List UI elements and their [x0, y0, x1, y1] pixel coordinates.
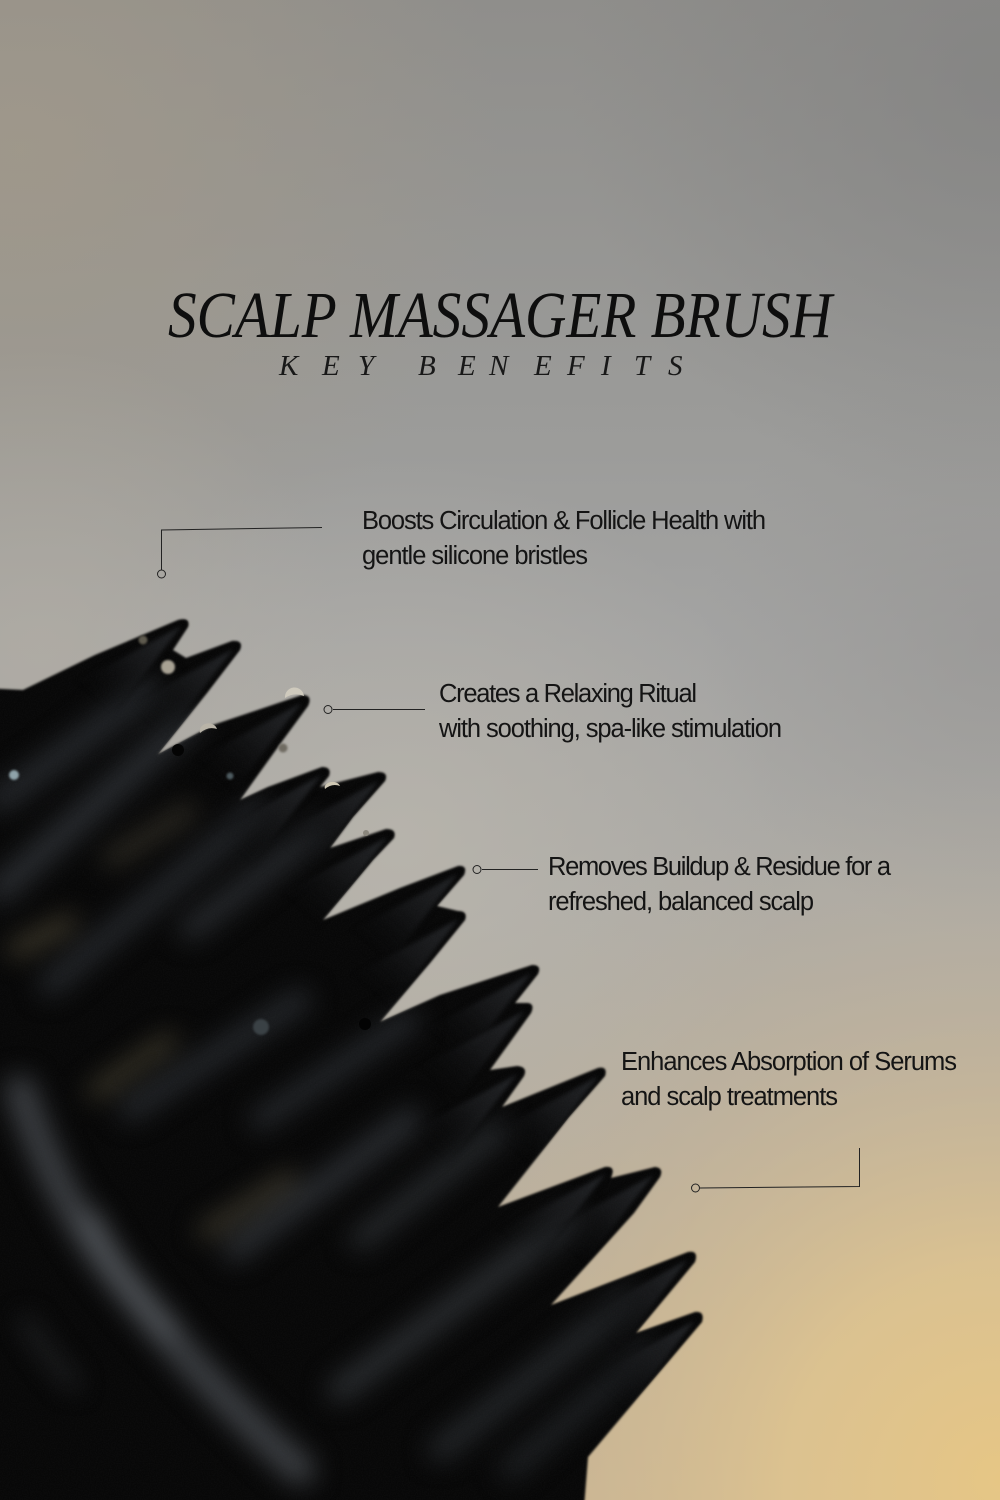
- benefit 2 text: with soothing, spa-like stimulation: [438, 715, 782, 743]
- benefit 3 text: refreshed, balanced scalp: [548, 888, 814, 916]
- benefit 4 text: and scalp treatments: [621, 1083, 838, 1111]
- subtitle: KEYBENEFITS: [278, 350, 683, 382]
- title: SCALP MASSAGER BRUSH: [168, 279, 835, 352]
- benefit 1 text: Boosts Circulation & Follicle Health with: [362, 507, 766, 535]
- callout 1: [158, 507, 766, 578]
- benefit 4 text: Enhances Absorption of Serums: [621, 1048, 957, 1076]
- benefit 2 text: [438, 680, 782, 743]
- in-focus bristle cones: [115, 620, 692, 1401]
- soft out-of-focus bristle highlights: [0, 690, 650, 1470]
- benefit 3 text: Removes Buildup & Residue for a: [548, 853, 892, 881]
- connector 1: [158, 528, 322, 578]
- benefit 4 text: [621, 1048, 957, 1111]
- connector 4: [692, 1148, 860, 1192]
- callout 4: [621, 1048, 957, 1192]
- brush silhouette with bristles: [0, 600, 720, 1500]
- callout 2: [324, 680, 782, 743]
- callout 3: [473, 853, 892, 916]
- tan reflections: [15, 922, 70, 950]
- benefit 1 text: [362, 507, 766, 570]
- benefit 1 text: gentle silicone bristles: [362, 542, 588, 570]
- water droplets and bokeh: [9, 636, 371, 1035]
- ring highlight: [20, 1090, 300, 1470]
- benefit 3 text: [548, 853, 892, 916]
- connector 2: [324, 706, 425, 714]
- connector 3: [473, 866, 538, 874]
- benefit 2 text: Creates a Relaxing Ritual: [439, 680, 697, 708]
